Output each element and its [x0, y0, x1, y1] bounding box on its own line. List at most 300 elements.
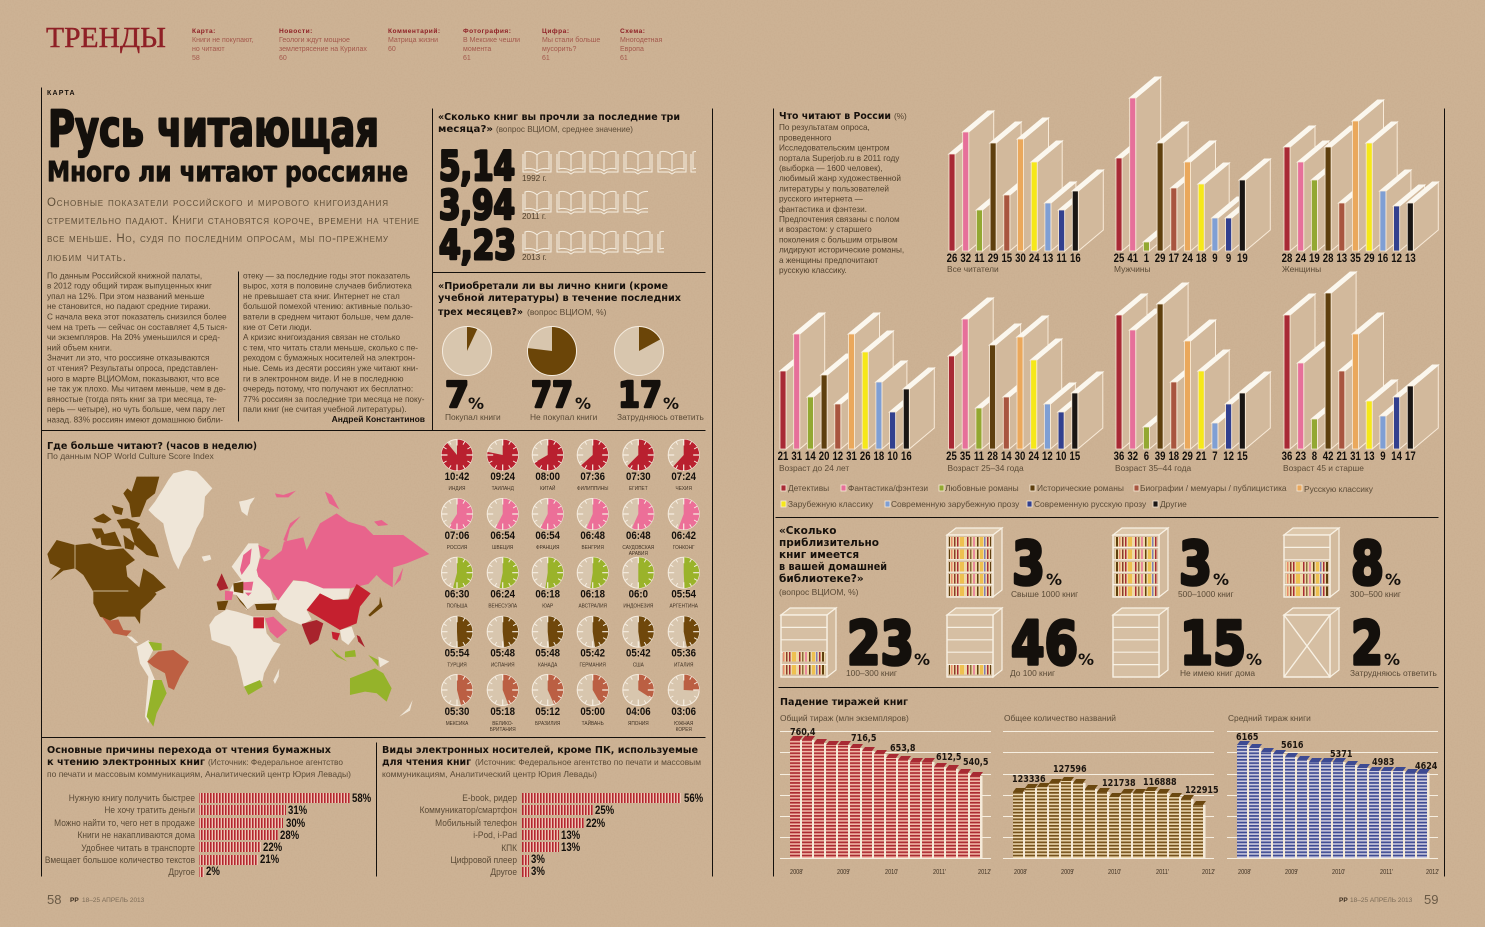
3D bar chart: age 25-34: 28 — [987, 450, 998, 463]
map heading: Где больше читают? — [47, 440, 163, 452]
clock: Hong Kong — [668, 498, 699, 551]
3D bar chart: age 45 and older: 14 — [1391, 450, 1402, 463]
question heading: учебной литературы) в течение последних — [438, 292, 682, 304]
bar chart: devices — [420, 792, 704, 878]
question heading: (вопрос ВЦИОМ, среднее значение) — [496, 124, 633, 134]
pie 77%: 77 — [531, 375, 573, 416]
stacked chart: total print run — [780, 713, 991, 876]
clock: Indonesia: ИНДОНЕЗИЯ — [623, 603, 654, 610]
bar chart: reasons: Вмещает большое количество текстов — [45, 855, 195, 865]
nav item: scheme: Европа — [620, 46, 644, 53]
question heading: трех месяцев?» — [438, 307, 523, 318]
values: 716,5 — [851, 733, 876, 744]
3D bar chart: age 45 and older: 31 — [1350, 450, 1361, 463]
values: 612,5 — [936, 752, 961, 763]
3D bar chart: age 45 and older: 17 — [1405, 450, 1416, 463]
legend: genres — [781, 483, 1374, 509]
clock: Australia — [577, 557, 608, 610]
years: 2008' — [1238, 868, 1251, 876]
bookcase: up to 100 books: До 100 книг — [1010, 668, 1055, 678]
legend: genres: Биографии / мемуары / публицистика — [1140, 483, 1287, 493]
lead text: любим читать. — [47, 252, 126, 264]
clock: Japan: ЯПОНИЯ — [628, 721, 649, 727]
article body, column 1: упал на 12%. При этом названий меньше — [47, 292, 205, 301]
clock: Argentina: АРГЕНТИНА — [669, 603, 698, 610]
clock: Great Britain: 05:18 — [490, 705, 515, 718]
3D bar chart: men: 25 — [1114, 252, 1124, 265]
legend: genres: Русскую классику — [1304, 484, 1374, 494]
nav item: comment: Комментарий: — [388, 27, 441, 35]
3D bar chart: age under 24: 16 — [901, 450, 912, 463]
clock: Taiwan: 05:00 — [580, 705, 605, 718]
bookcase: over 1000 books: Свыше 1000 книг — [1011, 589, 1078, 599]
clock: Hungary: ВЕНГРИЯ — [582, 545, 604, 551]
stacked chart: total titles — [1003, 713, 1219, 876]
3D bar chart: age 45 and older: 36 — [1282, 450, 1292, 463]
values: 121738 — [1102, 778, 1136, 789]
3D bar chart: all readers: 32 — [960, 252, 971, 265]
nav item: comment: Матрица жизни — [388, 37, 438, 44]
footer right — [1339, 892, 1438, 907]
years: 2011' — [1380, 868, 1393, 876]
clock: Saudi Arabia: 06:48 — [626, 529, 651, 542]
what Russia reads: intro text — [779, 111, 907, 275]
bar chart: devices: Коммуникатор/смартфон — [420, 805, 517, 815]
nav item: photo: 61 — [463, 55, 471, 62]
clock: Great Britain: БРИТАНИЯ — [490, 727, 516, 733]
footer right: РР — [1339, 897, 1348, 904]
3D bar chart: women: Женщины — [1282, 264, 1321, 274]
clock: Saudi Arabia — [622, 498, 654, 557]
bookcase: 300-500 books: 300–500 книг — [1350, 589, 1401, 599]
question heading: «Сколько книг вы прочли за последние три — [438, 112, 680, 123]
article body, column 1: от чтения? Результаты опроса, представлен- — [47, 364, 218, 373]
nav item: photo: момента — [463, 46, 491, 53]
3D bar chart: women: 29 — [1364, 252, 1375, 265]
bar chart: devices: 13% — [561, 841, 581, 854]
chart title: Средний тираж книги — [1228, 713, 1311, 723]
article body, column 1: перь — четыре), но чуть больше, чем пару лет — [47, 405, 225, 414]
3D bar chart: age under 24: 31 — [846, 450, 857, 463]
lead text: Основные показатели российского и мирового книгоиздания — [47, 197, 388, 209]
clock: Venezuela — [487, 557, 518, 610]
unit: (%) — [894, 112, 907, 121]
3D bar chart: men: 9 — [1212, 252, 1218, 265]
bar chart: reasons: Не хочу тратить деньги — [104, 805, 195, 815]
paragraph: По результатам опроса, — [779, 123, 870, 132]
bar chart: reasons: 21% — [260, 853, 280, 866]
3D bar chart: all readers: Все читатели — [947, 264, 999, 274]
nav item: scheme: Схема: — [620, 28, 646, 35]
bar chart: reasons: 58% — [352, 792, 372, 805]
panel: e-reading devices — [382, 745, 704, 878]
clock: France — [532, 498, 563, 551]
pie 77%: % — [575, 394, 591, 413]
3D bar chart: age 25-34: 25 — [946, 450, 957, 463]
article body, column 2: с тем, что читать стали меньше, сколько с пе- — [243, 343, 418, 352]
clock: India — [442, 440, 472, 492]
paragraph: любимый жанр художественной — [779, 174, 901, 183]
paragraph: русского интернета — — [779, 195, 864, 204]
panel: reasons for switching to e-books — [45, 744, 372, 878]
3D bar chart: all readers: 11 — [1057, 252, 1067, 265]
values: 4983 — [1372, 757, 1394, 768]
years: 2011' — [1156, 868, 1169, 876]
3D bar chart: age 35-44: 29 — [1182, 450, 1193, 463]
3D bar chart: women: 19 — [1309, 252, 1320, 265]
bookcase: 100-300 books: 100–300 книг — [846, 668, 897, 678]
bar chart: devices: 13% — [561, 829, 581, 842]
3D bar chart: women — [1282, 100, 1438, 274]
3D bar chart: all readers: 24 — [1029, 252, 1040, 265]
clock: Indonesia — [623, 557, 654, 610]
article body, column 2: вырос, хотя в половине случаев библиотека — [243, 282, 412, 291]
clock: Turkey: 05:54 — [445, 647, 469, 660]
values — [790, 727, 988, 768]
bar chart: devices: 3% — [531, 865, 545, 878]
3D bar chart: age 35-44: 39 — [1155, 450, 1165, 463]
3D bar chart: age 25-34: 30 — [1015, 450, 1025, 463]
article body, column 1: не так уж плохо. Мы читаем меньше, чем в де- — [47, 385, 226, 394]
clock: Philippines: 07:36 — [580, 470, 605, 483]
home library question heading: «Сколько — [779, 525, 836, 537]
footer left: РР — [70, 897, 79, 904]
bar chart: reasons: Удобнее читать в транспорте — [81, 843, 195, 853]
values: 6165 — [1236, 732, 1258, 743]
clock: France: ФРАНЦИЯ — [536, 545, 560, 551]
clock: Poland — [442, 557, 472, 610]
3D bar chart: age 45 and older: 9 — [1380, 450, 1386, 463]
values: 123336 — [1012, 774, 1046, 785]
clock: Argentina: 05:54 — [671, 588, 696, 601]
panel: books read in three months — [438, 113, 696, 266]
3D bar chart: age 45 and older: 8 — [1312, 450, 1317, 463]
map heading — [47, 440, 257, 461]
years — [1238, 868, 1439, 876]
3D bar chart: age under 24 — [778, 313, 934, 473]
clock: Germany: 05:42 — [580, 647, 605, 660]
legend: genres: Детективы — [788, 483, 829, 493]
bookcase: 100-300 books: % — [914, 650, 930, 669]
nav item: map: 58 — [192, 55, 200, 62]
clock: Mexico — [442, 674, 472, 727]
nav item: news — [279, 28, 367, 62]
3D bar chart: women: 12 — [1391, 252, 1402, 265]
3D bar chart: age under 24: 10 — [887, 450, 898, 463]
clock: Japan — [623, 674, 654, 727]
clock: South Africa: 06:18 — [535, 588, 560, 601]
years: 2010' — [885, 868, 898, 876]
3D bar chart: men: 19 — [1237, 252, 1248, 265]
bar chart: devices: Мобильный телефон — [435, 818, 517, 828]
nav item: map: Книги не покупают, — [192, 37, 254, 44]
pie 17%: % — [663, 394, 679, 413]
values: 5371 — [1330, 749, 1352, 760]
nav item: number: мусорить? — [542, 46, 576, 53]
article body, column 2: большой помехой чтению: активные пользо- — [243, 302, 413, 311]
article title block — [47, 90, 419, 264]
article body, column 2: не превышает ста книг. Интернет не стал — [243, 292, 400, 301]
section header: trends — [46, 22, 662, 62]
clock: Saudi Arabia: САУДОВСКАЯ — [622, 545, 654, 551]
3D bar chart: age 35-44: 21 — [1196, 450, 1207, 463]
3D bar chart: men: 9 — [1226, 252, 1231, 265]
3D bar chart: age 25-34: 14 — [1001, 450, 1012, 463]
question heading: (вопрос ВЦИОМ, %) — [527, 307, 607, 317]
clock: China: 08:00 — [535, 470, 560, 483]
years: 2009' — [837, 868, 850, 876]
clock: Spain — [487, 616, 518, 669]
paragraph: поколения с большим отрывом — [779, 235, 898, 244]
nav item: number — [542, 28, 600, 62]
clock: Spain: ИСПАНИЯ — [491, 662, 515, 669]
pie 17%: Затрудняюсь ответить — [617, 412, 704, 422]
values: 127596 — [1053, 764, 1087, 775]
bookcase: over 1000 books — [947, 528, 1078, 599]
bookcase: 500-1000 books: % — [1213, 570, 1229, 589]
bookcase: no books — [1113, 608, 1262, 679]
3D bar chart: all readers — [947, 111, 1103, 274]
home library question heading: (вопрос ВЦИОМ, %) — [779, 587, 859, 597]
clock: Mexico: МЕКСИКА — [446, 721, 469, 727]
nav item: news: Новости: — [279, 28, 313, 35]
article body, column 1: вяностые (тогда пять книг за три месяца, те- — [47, 395, 217, 404]
3D bar chart: age 45 and older: 23 — [1295, 450, 1306, 463]
heading: trends: ТРЕНДЫ — [46, 22, 166, 54]
clock: Australia: АВСТРАЛИЯ — [578, 603, 607, 610]
nav item: scheme: 61 — [620, 55, 628, 62]
clock: Spain: 05:48 — [490, 647, 515, 660]
paragraph: литературы у пользователей — [779, 184, 889, 193]
bar chart: devices: i-Pod, i-Pad — [473, 830, 517, 840]
bookcase: up to 100 books: % — [1078, 650, 1094, 669]
footer right: 18–25 АПРЕЛЬ 2013 — [1350, 897, 1413, 904]
3D bar chart: age 25-34: 10 — [1056, 450, 1066, 463]
3D bar chart: women: 28 — [1323, 252, 1333, 265]
3D bar chart: men: 24 — [1182, 252, 1193, 265]
3D bar chart: women: 16 — [1378, 252, 1388, 265]
heading: Основные причины перехода от чтения бумажных — [47, 744, 332, 756]
3D bar chart: age 25-34: Возраст 25–34 года — [948, 463, 1024, 473]
clock: Philippines: ФИЛИППИНЫ — [577, 486, 609, 492]
nav item: scheme — [620, 28, 662, 62]
3D bar chart: all readers: 11 — [974, 252, 984, 265]
clock: Taiwan — [577, 674, 608, 727]
bookcase: no books: Не имею книг дома — [1180, 668, 1255, 678]
value 2013: 2013 г. — [522, 253, 547, 262]
bar chart: devices: 22% — [586, 817, 606, 830]
clock: Great Britain — [487, 674, 518, 733]
years: 2009' — [1061, 868, 1074, 876]
value 1992: 1992 г. — [522, 174, 547, 183]
nav item: number: 61 — [542, 55, 550, 62]
article body, column 2: ватели в среднем читают больше, чем дале- — [243, 312, 414, 322]
3D bar chart: age 45 and older: 21 — [1336, 450, 1347, 463]
map heading: По данным NOP World Culture Score Index — [47, 451, 214, 461]
bookcase: 500-1000 books: 3 — [1179, 529, 1212, 599]
article body, column 2: 77% россиян за последние три месяца не поку- — [243, 395, 425, 404]
bookcase: 100-300 books — [781, 608, 930, 679]
heading: Что читают в России — [779, 111, 891, 122]
3D bar chart: men: Мужчины — [1114, 264, 1151, 274]
heading: (Источник: Федеральное агентство — [208, 757, 343, 767]
legend: genres: Современную русскую прозу — [1034, 499, 1147, 509]
byline: Андрей Константинов — [332, 414, 425, 424]
article body, column 2: пали книг (не считая учебной литературы). — [243, 405, 407, 414]
3D bar chart: women: 28 — [1282, 252, 1292, 265]
pie 7% — [442, 326, 501, 422]
article body, column 1: ного в марте ВЦИОМом, показывают, что все — [47, 374, 220, 383]
years: 2008' — [1014, 868, 1027, 876]
nav item: number: Мы стали больше — [542, 36, 600, 44]
clock: Russia: 07:06 — [445, 529, 469, 542]
heading: по печати и массовым коммуникациям, Аналитический центр Юрия Левады) — [47, 769, 351, 779]
paragraph: лидируют исторические романы, — [779, 246, 904, 255]
bookcase: over 1000 books: 3 — [1012, 529, 1045, 599]
nav item: comment: 60 — [388, 46, 396, 53]
3D bar chart: men: 1 — [1144, 252, 1149, 265]
rubric: КАРТА — [47, 90, 76, 97]
clock: Canada: КАНАДА — [538, 662, 558, 669]
home library question heading: в вашей домашней — [779, 561, 887, 573]
3D bar chart: all readers: 26 — [947, 252, 957, 265]
clock: Hong Kong: ГОНКОНГ — [673, 545, 695, 551]
paragraph: (выборка — 1600 человек), — [779, 164, 883, 173]
heading: (Источник: Федеральное агентство по печати и массовым — [475, 757, 701, 767]
clock: Indonesia: 06:0 — [629, 588, 648, 601]
article body, column 2: реходом с бумажных носителей на электрон- — [243, 354, 415, 363]
article body, column 1: назад. 83% россиян имеют домашнюю библи- — [47, 416, 223, 424]
3D bar chart: age 35-44: 36 — [1114, 450, 1124, 463]
article body, column 2: кие от Сети люди. — [243, 323, 312, 332]
3D bar chart: age under 24: 26 — [860, 450, 871, 463]
3D bar chart: age 35-44: 7 — [1212, 450, 1218, 463]
value 2013 — [439, 228, 664, 266]
bar chart: reasons: 28% — [280, 829, 300, 842]
article body, column 1: в 2012 году общий тираж выпущенных книг — [47, 282, 212, 291]
clock: Venezuela: ВЕНЕСУЭЛА — [488, 603, 518, 610]
nav item: news: 60 — [279, 55, 287, 62]
3D bar chart: all readers: 30 — [1015, 252, 1026, 265]
3D bar chart: men: 17 — [1168, 252, 1179, 265]
values — [1012, 764, 1219, 796]
3D bar chart: women: 13 — [1405, 252, 1416, 265]
bookcase: 500-1000 books: 500–1000 книг — [1178, 589, 1234, 599]
years — [790, 868, 991, 876]
question heading — [438, 280, 682, 318]
pie 17%: 17 — [618, 375, 662, 416]
heading: коммуникациям, Аналитический центр Юрия Левады) — [382, 769, 597, 779]
home library question heading: книг имеется — [779, 549, 859, 561]
heading: Виды электронных носителей, кроме ПК, используемые — [382, 745, 698, 756]
3D bar chart: age 25-34: 11 — [974, 450, 984, 463]
lead text: стремительно падают. Книги становятся короче, времени на чтение — [47, 215, 419, 227]
nav item: map: Карта: — [192, 28, 216, 35]
clock: Egypt — [623, 440, 654, 492]
nav item: news: землетрясение на Курилах — [279, 46, 367, 53]
3D bar chart: age under 24: 20 — [819, 450, 829, 463]
chart title: Общий тираж (млн экземпляров) — [780, 713, 909, 723]
clock: China: КИТАЙ — [540, 484, 556, 492]
legend: genres: Другие — [1160, 499, 1187, 509]
bar chart: devices: 56% — [684, 792, 704, 805]
3D bar chart: women: 35 — [1350, 252, 1361, 265]
question heading — [438, 112, 680, 135]
article body, column 1: С начала века этот показатель снизился более — [47, 312, 227, 322]
nav item: comment — [388, 27, 441, 53]
main title: Русь читающая — [48, 100, 379, 158]
bar chart: reasons: Можно найти то, чего нет в продаже — [54, 818, 195, 828]
clock: Australia: 06:18 — [580, 588, 605, 601]
clock: India: 10:42 — [445, 470, 469, 483]
world map — [47, 470, 429, 727]
bar chart: devices: Другое — [490, 867, 517, 877]
clock: Japan: 04:06 — [626, 705, 651, 718]
bar chart: reasons: 22% — [263, 841, 283, 854]
legend: genres: Зарубежную классику — [788, 499, 874, 509]
value 1992: 5,14 — [439, 144, 515, 190]
clock: Taiwan: ТАЙВАНЬ — [582, 719, 604, 727]
bar chart: devices: Цифровой плеер — [451, 855, 517, 865]
footer right: 59 — [1424, 892, 1438, 907]
value 2011 — [440, 188, 648, 226]
clock: Venezuela: 06:24 — [490, 588, 515, 601]
3D bar chart: men: 18 — [1196, 252, 1207, 265]
bookcase: up to 100 books: 46 — [1011, 609, 1078, 679]
bookcase: 300-500 books: % — [1385, 570, 1401, 589]
value 2011: 2011 г. — [522, 212, 546, 221]
clock: Brazil: 05:12 — [535, 705, 560, 718]
bar chart: reasons — [45, 792, 372, 878]
stacked chart: average print run — [1227, 713, 1439, 876]
footer left: 58 — [47, 892, 61, 907]
bookcase crossed: undecided — [1284, 608, 1437, 679]
article body, column 1: По данным Российской книжной палаты, — [47, 271, 202, 280]
3D bar chart: all readers: 29 — [988, 252, 998, 265]
heading — [382, 745, 701, 779]
clock: Turkey — [442, 616, 472, 669]
3D bar chart: age under 24: 31 — [791, 450, 802, 463]
article body, column 1: ний объем книги. — [47, 343, 112, 352]
bookcase: 300-500 books: 8 — [1351, 529, 1384, 599]
paragraph: Исследовательским центром — [779, 144, 890, 153]
clock: South Korea: КОРЕЯ — [676, 727, 692, 733]
bookcase: 100-300 books: 23 — [847, 609, 914, 679]
bar chart: reasons: 31% — [288, 804, 308, 817]
clock: China — [532, 440, 563, 492]
clock: Saudi Arabia: АРАВИЯ — [629, 551, 648, 557]
clock: Thailand — [487, 440, 518, 492]
clock: Hungary: 06:48 — [580, 529, 605, 542]
3D bar chart: age 25-34 — [946, 298, 1103, 473]
clock: Italy — [668, 616, 699, 669]
legend: genres: Фантастика/фэнтези — [848, 483, 928, 493]
bar chart: reasons: Нужную книгу получить быстрее — [69, 793, 195, 803]
values: 4624 — [1415, 761, 1437, 772]
print runs section heading: Падение тиражей книг — [780, 697, 908, 708]
years: 2008' — [790, 868, 803, 876]
3D bar chart: all readers: 16 — [1070, 252, 1081, 265]
paragraph: портала Superjob.ru в 2011 году — [779, 154, 900, 163]
clock: Czechia: ЧЕХИЯ — [676, 486, 692, 492]
years: 2009' — [1285, 868, 1298, 876]
heading: для чтения книг — [382, 757, 471, 768]
home library question heading: библиотеке?» — [779, 573, 864, 585]
bar chart: devices: 3% — [531, 853, 545, 866]
values: 122915 — [1185, 785, 1219, 796]
3D bar chart: age 45 and older: 42 — [1323, 450, 1333, 463]
heading — [47, 744, 351, 779]
